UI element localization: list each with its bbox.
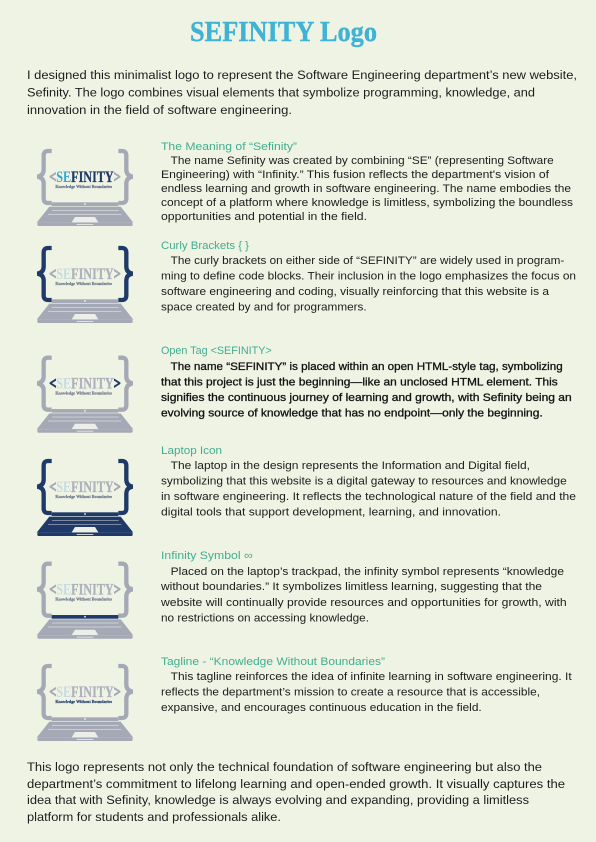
logo: navy hinge bar: Knowledge Without Boundaries	[55, 597, 112, 602]
body text	[161, 255, 576, 314]
body text: endless learning and growth in software engineering. The name embodies the	[161, 183, 571, 195]
logo: navy curly brackets	[37, 248, 133, 323]
panel: laptop icon	[37, 445, 576, 536]
body text: digital tools that support development, learning, and innovation.	[161, 507, 501, 519]
body text: Engineering) with “Infinity.” This fusion reflects the department's vision of	[161, 169, 550, 181]
body text: signifies the continuous journey of learning and growth, with Sefinity being an	[161, 392, 572, 404]
body text: ming to define code blocks. Their inclusion in the logo emphasizes the focus on	[161, 271, 576, 283]
body text: space created by and for programmers.	[161, 302, 367, 314]
body text: symbolizing that this website is a digital gateway to resources and knowledge	[161, 476, 567, 488]
intro paragraph	[27, 68, 577, 117]
logo: full colour wordmark: <SEFINITY>	[49, 169, 121, 186]
body text: opportunities and potential in the field.	[161, 211, 367, 223]
body text: This tagline reinforces the idea of infinite learning in software engineering. It	[171, 671, 573, 683]
logo: navy open tag chevrons: Knowledge Without Boundaries	[55, 391, 112, 396]
heading: Open Tag <SEFINITY>	[161, 345, 272, 357]
intro paragraph: Sefinity. The logo combines visual elements that symbolize programming, knowledge, and	[27, 86, 535, 100]
body text	[160, 566, 567, 625]
closing paragraph	[27, 760, 565, 824]
logo: navy hinge bar: <SEFINITY>	[49, 582, 121, 599]
body text: The laptop in the design represents the Information and Digital field,	[171, 460, 530, 472]
logo: navy laptop	[37, 461, 133, 536]
logo: navy laptop: Knowledge Without Boundaries	[55, 494, 112, 499]
panel: open tag	[37, 345, 572, 433]
logo: navy curly brackets: <SEFINITY>	[49, 266, 121, 283]
logo: navy laptop: <SEFINITY>	[49, 479, 121, 496]
logo: full colour wordmark: Knowledge Without Boundaries	[55, 184, 112, 189]
body text: The name Sefinity was created by combining “SE” (representing Software	[171, 155, 554, 167]
intro paragraph: innovation in the field of software engineering.	[27, 103, 292, 117]
panel: meaning of Sefinity	[37, 141, 573, 226]
body text: that this project is just the beginning—like an unclosed HTML element. This	[161, 377, 558, 389]
body text	[161, 155, 573, 223]
body text: website will continually provide resources and opportunities for growth, with	[160, 597, 567, 609]
heading: The Meaning of “Sefinity”	[161, 141, 297, 153]
closing paragraph: platform for students and professionals alike.	[27, 810, 281, 824]
heading: Laptop Icon	[161, 445, 222, 457]
body text	[161, 361, 572, 420]
heading: Tagline - “Knowledge Without Boundaries”	[161, 656, 385, 668]
panel: tagline	[37, 656, 573, 741]
logo: navy hinge bar	[37, 564, 133, 639]
body text: reflects the department’s mission to create a resource that is accessible,	[161, 687, 540, 699]
body text: evolving source of knowledge that has no endpoint—only the beginning.	[161, 408, 543, 420]
logo: navy open tag chevrons	[37, 358, 133, 433]
body text: in software engineering. It reflects the technological nature of the field and the	[161, 491, 576, 503]
closing paragraph: idea that with Sefinity, knowledge is always evolving and expanding, providing a limitless	[27, 793, 529, 807]
intro paragraph: I designed this minimalist logo to represent the Software Engineering department’s new website,	[27, 68, 577, 82]
body text: software engineering and coding, visually reinforcing that this website is a	[161, 286, 550, 298]
logo: navy tagline: Knowledge Without Boundaries	[55, 699, 112, 704]
body text: expansive, and encourages continuous education in the field.	[161, 702, 482, 714]
logo: navy open tag chevrons: <SEFINITY>	[49, 376, 121, 393]
heading: Curly Brackets { }	[161, 240, 249, 252]
closing paragraph: department’s commitment to lifelong learning and open-ended growth. It visually captures the	[27, 777, 565, 791]
title: SEFINITY Logo	[190, 16, 377, 48]
body text	[161, 460, 576, 519]
panel: infinity symbol	[37, 550, 567, 639]
logo: navy curly brackets: Knowledge Without Boundaries	[55, 281, 112, 286]
body text	[161, 671, 573, 714]
logo: navy tagline: <SEFINITY>	[49, 684, 121, 701]
body text: The curly brackets on either side of “SEFINITY” are widely used in program-	[171, 255, 565, 267]
body text: Placed on the laptop’s trackpad, the infinity symbol represents “knowledge	[171, 566, 564, 578]
body text: without boundaries.” It symbolizes limitless learning, suggesting that the	[160, 581, 542, 593]
logo: full colour wordmark	[37, 151, 133, 226]
logo: navy tagline	[37, 666, 133, 741]
body text: concept of a platform where knowledge is limitless, symbolizing the boundless	[161, 197, 573, 209]
closing paragraph: This logo represents not only the technical foundation of software engineering but also the	[27, 760, 542, 774]
heading: Infinity Symbol ∞	[161, 550, 253, 562]
panel: curly brackets	[37, 240, 576, 323]
body text: no restrictions on accessing knowledge.	[161, 613, 369, 625]
body text: The name “SEFINITY” is placed within an open HTML-style tag, symbolizing	[171, 361, 563, 373]
